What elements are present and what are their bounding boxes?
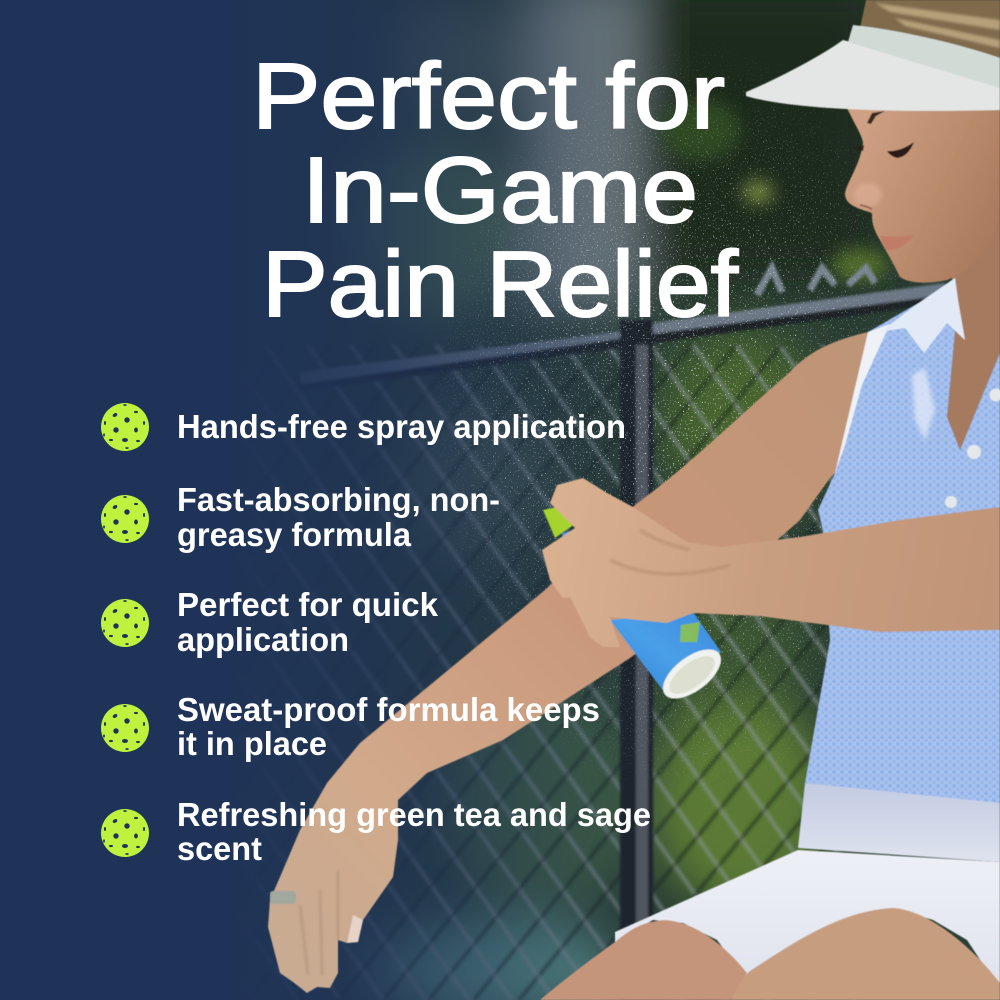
skirt [615,783,1000,990]
benefit: sweat-proof [101,691,600,762]
benefit: fast-absorbing [101,481,500,553]
benefit: fast-absorbing: greasy formula [177,516,412,553]
benefit: quick application: Perfect for quick [177,586,439,623]
legs [540,908,1000,1000]
hair [860,0,1000,128]
spray mist [430,44,930,796]
title: In-Game [302,138,698,242]
visor [746,25,1000,111]
title [252,44,738,336]
spray can [543,503,729,708]
benefit: scent [101,796,651,867]
benefit: sweat-proof: it in place [177,725,327,762]
shirt [805,278,1000,805]
extended arm and hand [268,332,868,993]
benefit: hands-free: Hands-free spray application [177,408,626,445]
neck and chest [930,200,1000,450]
chain-link fence [240,268,945,1000]
benefit: quick application [101,586,439,658]
benefit: sweat-proof: Sweat-proof formula keeps [177,691,600,728]
benefit: hands-free [101,403,626,451]
benefit: fast-absorbing: Fast-absorbing, non- [177,481,500,518]
benefit: quick application: application [177,621,349,658]
benefit: scent: Refreshing green tea and sage [177,796,651,833]
benefits list [101,403,651,867]
title: Pain Relief [262,232,738,336]
face [845,105,1000,283]
benefit: scent: scent [177,830,262,867]
title: Perfect for [252,44,725,148]
second arm and gripping hand [542,478,1000,647]
woman in visor spraying her arm [268,0,1000,1000]
